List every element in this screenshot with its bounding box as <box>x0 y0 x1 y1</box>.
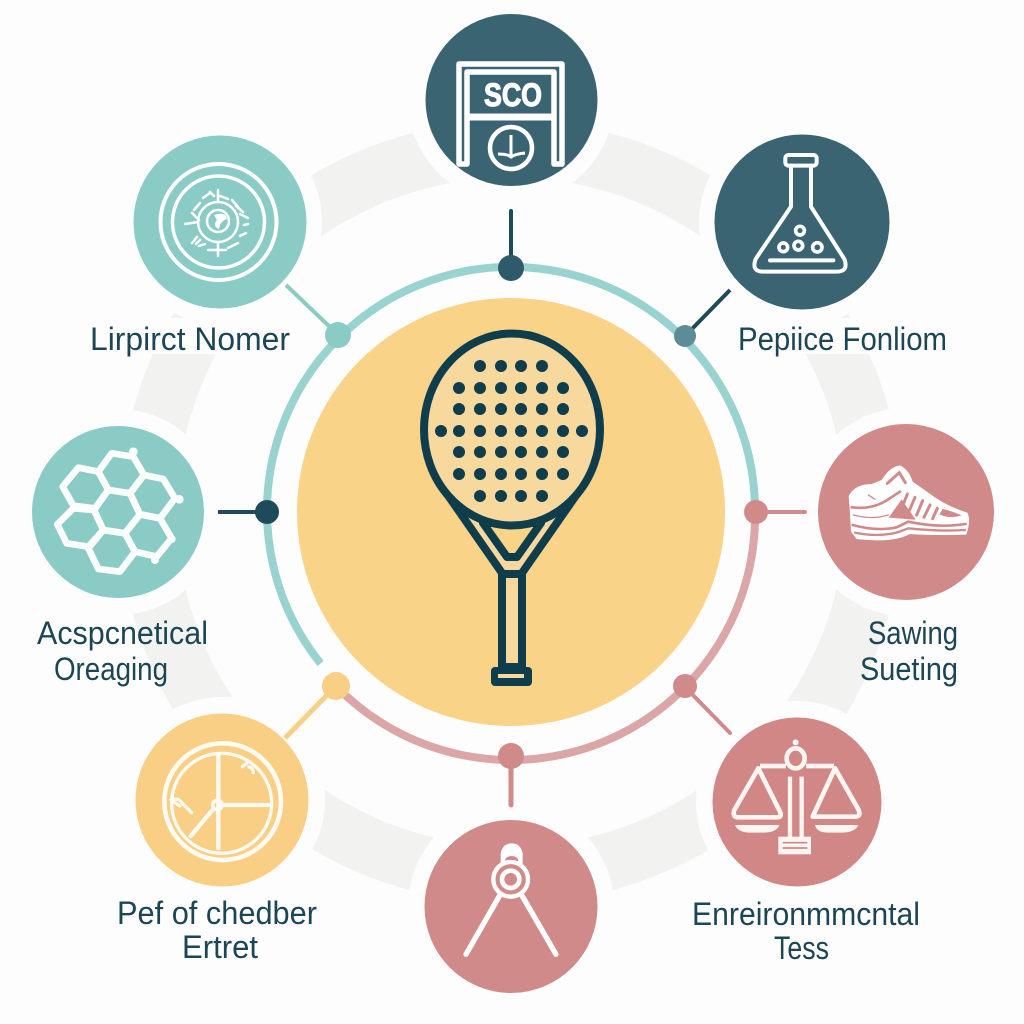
label: bottom right <box>692 896 920 966</box>
node: balance scale <box>712 718 882 886</box>
label: top right: Pepiice Fonliom <box>738 321 947 357</box>
icon: padel racket <box>424 334 600 686</box>
label: right <box>860 615 958 687</box>
connector: top right <box>674 290 730 347</box>
node: impact globe icon <box>134 136 306 308</box>
label: left: Acspcnetical <box>37 615 208 651</box>
connector: left <box>218 500 279 524</box>
label: right: Sueting <box>860 651 958 687</box>
outer ring: teal arc <box>267 267 755 664</box>
connector: right <box>744 500 805 524</box>
connector: bottom right <box>673 674 730 733</box>
label: bottom right: Tess <box>774 930 829 966</box>
label: bottom left: Pef of chedber <box>117 895 317 931</box>
label: top left: Lirpirct Nomer <box>90 321 290 357</box>
outer ring: pink arc <box>336 512 755 760</box>
connector: top <box>498 211 524 281</box>
connector: top left <box>286 285 351 348</box>
label: left <box>37 615 208 687</box>
node: lab flask <box>714 134 890 310</box>
node: score board <box>426 14 598 186</box>
node: score board: SCO <box>484 77 542 113</box>
label: bottom left: Ertret <box>182 929 258 965</box>
node: shoe <box>818 424 994 600</box>
label: bottom left <box>117 895 317 965</box>
central circle <box>297 298 725 726</box>
label: right: Sawing <box>868 615 958 651</box>
connector: bottom <box>498 743 524 805</box>
label: bottom right: Enreironmmcntal <box>692 896 920 932</box>
connector: bottom left <box>285 672 350 738</box>
label: left: Oreaging <box>54 651 168 687</box>
node: hexagon molecule <box>32 426 204 598</box>
node: drawing compass <box>424 820 598 993</box>
node: gauge dial <box>136 714 308 886</box>
